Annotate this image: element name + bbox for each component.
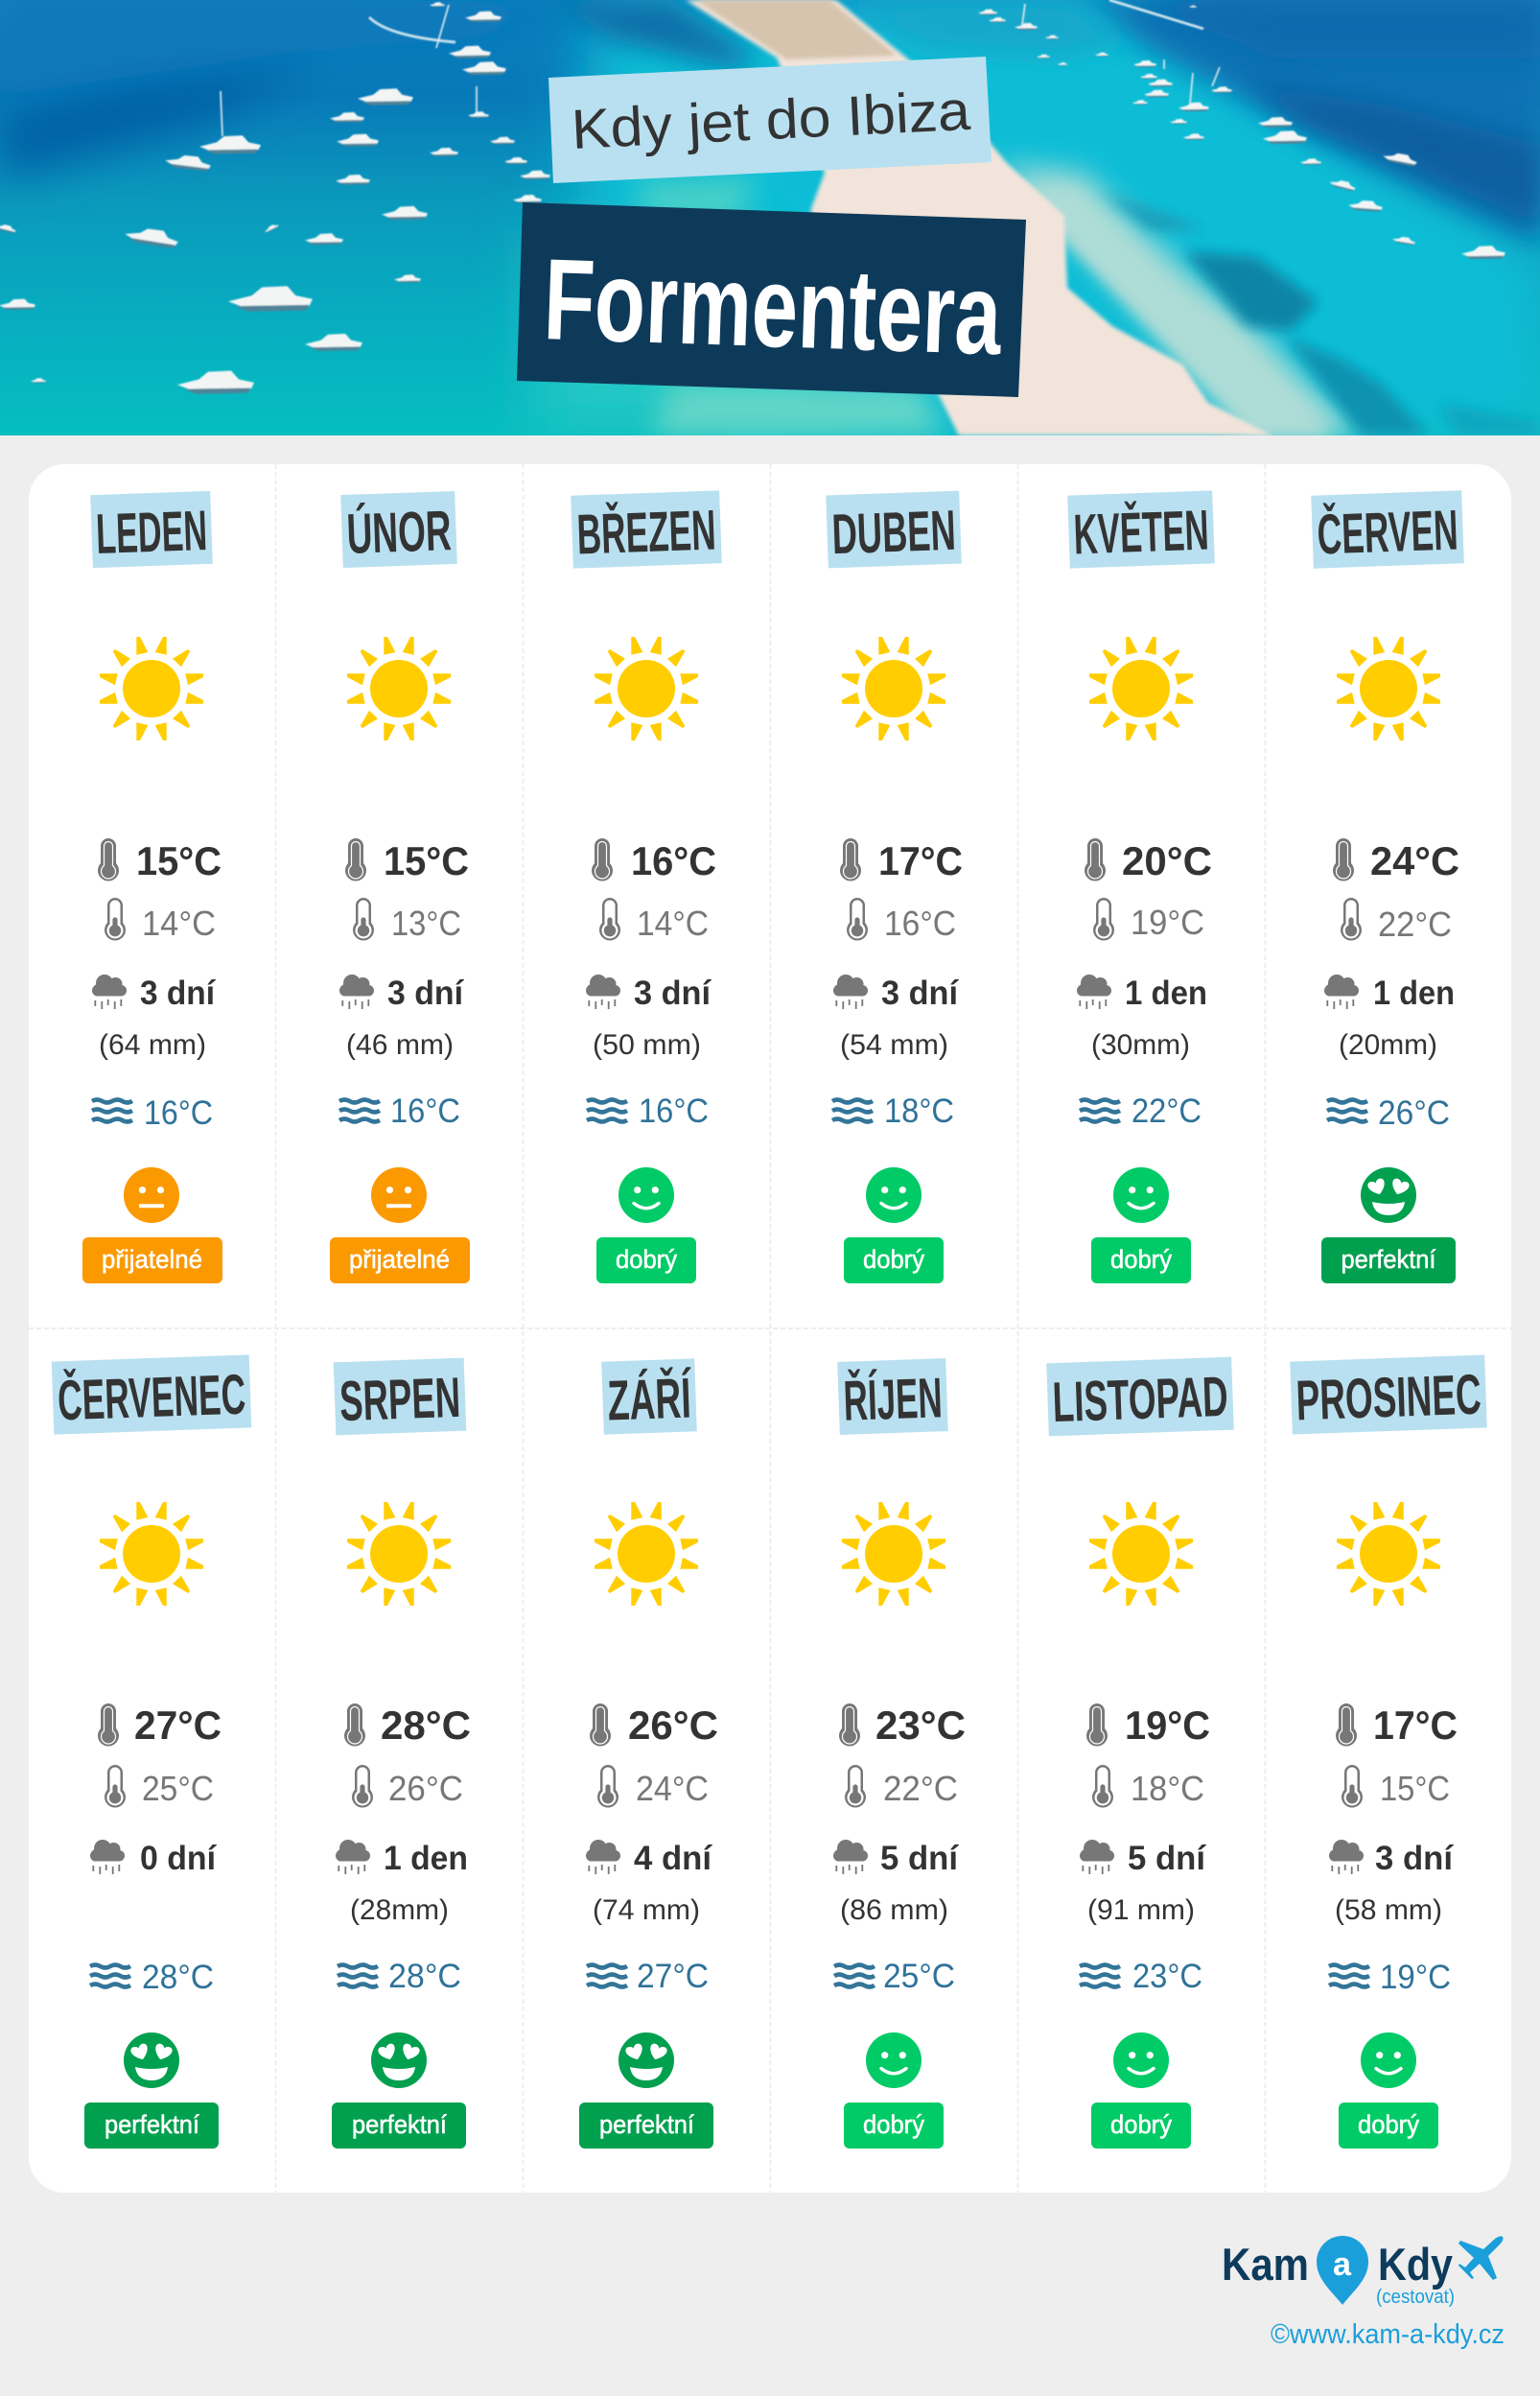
icon: rain cloud <box>1080 1840 1114 1874</box>
icon: thermometer min <box>847 898 868 941</box>
icon: thermometer max <box>98 838 119 881</box>
icon: rain cloud <box>92 975 127 1009</box>
icon: love face <box>371 2032 427 2088</box>
icon: waves <box>90 1964 130 1987</box>
precipitation: (50 mm) <box>593 1029 701 1061</box>
min temperature: 22°C <box>1378 904 1452 944</box>
sea temperature: 16°C <box>144 1094 213 1132</box>
icon: thermometer max <box>592 838 613 881</box>
max temperature: 24°C <box>1370 838 1459 883</box>
footer logo: Kam a Kdy (cestovat) <box>1222 2236 1504 2308</box>
precipitation: (28mm) <box>350 1894 449 1926</box>
month heading <box>826 491 962 568</box>
month heading: ČERVENEC <box>57 1362 246 1432</box>
sea temperature: 28°C <box>142 1959 214 1996</box>
icon: thermometer min <box>597 1765 618 1808</box>
rating badge <box>84 2102 219 2149</box>
icon: waves <box>834 1964 875 1987</box>
min temperature: 22°C <box>883 1769 958 1808</box>
icon: happy face <box>618 1167 674 1223</box>
rating badge: dobrý <box>616 1245 677 1274</box>
month heading <box>340 491 457 568</box>
min temperature: 14°C <box>142 904 216 943</box>
icon: sun <box>842 637 945 740</box>
icon: happy face <box>866 1167 922 1223</box>
rating badge: dobrý <box>1358 2110 1419 2139</box>
month heading <box>1046 1357 1234 1436</box>
month heading: DUBEN <box>830 499 957 566</box>
icon: waves <box>92 1099 132 1122</box>
month heading <box>52 1354 251 1435</box>
sea temperature: 19°C <box>1380 1959 1451 1996</box>
precipitation: (58 mm) <box>1335 1894 1442 1926</box>
icon: thermometer max <box>1085 838 1106 881</box>
footer logo: Kam a Kdy (cestovat): a <box>1333 2246 1352 2283</box>
icon: rain cloud <box>339 975 374 1009</box>
icon: thermometer min <box>105 898 126 941</box>
icon: waves <box>1327 1099 1367 1122</box>
month heading <box>90 491 213 568</box>
month panel: ÚNOR <box>330 491 470 1283</box>
icon: love face <box>618 2032 674 2088</box>
month panel: KVĚTEN <box>1067 490 1215 1283</box>
month heading <box>1067 490 1215 569</box>
max temperature: 19°C <box>1125 1703 1210 1748</box>
min temperature: 14°C <box>637 904 709 943</box>
month heading: ŘÍJEN <box>842 1365 944 1433</box>
min temperature: 18°C <box>1131 1769 1204 1808</box>
rating badge <box>1091 1237 1191 1283</box>
icon: rain cloud <box>586 1840 620 1874</box>
icon: rain cloud <box>1324 975 1359 1009</box>
min temperature: 24°C <box>636 1769 709 1808</box>
month panel: ŘÍJEN <box>833 1358 966 2149</box>
icon: sun <box>100 637 203 740</box>
rating badge: dobrý <box>1110 1245 1172 1274</box>
icon: sun <box>842 1502 945 1606</box>
website copyright: ©www.kam-a-kdy.cz <box>1271 2319 1505 2350</box>
icon: thermometer min <box>1092 1765 1113 1808</box>
footer logo: Kam a Kdy (cestovat): Kam <box>1222 2239 1309 2290</box>
icon: waves <box>1080 1099 1120 1122</box>
icon: airplane <box>1458 2236 1504 2280</box>
rainy days: 3 dní <box>140 975 216 1012</box>
rating badge: přijatelné <box>102 1245 202 1274</box>
rating badge: perfektní <box>352 2110 447 2139</box>
max temperature: 27°C <box>134 1703 222 1748</box>
month heading <box>571 490 722 569</box>
rating badge: dobrý <box>1110 2110 1172 2139</box>
rainy days: 0 dní <box>140 1840 217 1877</box>
icon: happy face <box>1361 2032 1416 2088</box>
icon: thermometer min <box>845 1765 866 1808</box>
icon: rain cloud <box>833 1840 868 1874</box>
rating badge <box>82 1237 222 1283</box>
icon: sun <box>595 637 698 740</box>
sea temperature: 16°C <box>639 1092 709 1130</box>
month heading <box>601 1358 697 1435</box>
max temperature: 26°C <box>628 1703 718 1748</box>
sea temperature: 25°C <box>883 1958 955 1995</box>
rating badge: přijatelné <box>349 1245 450 1274</box>
precipitation: (54 mm) <box>840 1029 948 1061</box>
month heading: ZÁŘÍ <box>606 1365 693 1432</box>
rating badge: perfektní <box>1341 1245 1436 1274</box>
min temperature: 19°C <box>1131 903 1204 942</box>
min temperature: 26°C <box>388 1769 463 1808</box>
icon: thermometer min <box>352 1765 373 1808</box>
max temperature: 20°C <box>1122 838 1212 883</box>
sea temperature: 16°C <box>390 1092 460 1130</box>
month panel: SRPEN <box>332 1358 471 2149</box>
month heading: SRPEN <box>338 1366 461 1433</box>
icon: sun <box>595 1502 698 1606</box>
rainy days: 3 dní <box>634 975 712 1012</box>
min temperature: 25°C <box>142 1769 214 1808</box>
month heading <box>837 1358 948 1435</box>
icon: map pin <box>1317 2236 1368 2305</box>
rating badge <box>1091 2102 1191 2149</box>
subtitle banner: Kdy jet do Ibiza <box>548 57 992 183</box>
rainy days: 1 den <box>1125 975 1207 1012</box>
min temperature: 13°C <box>391 904 461 943</box>
icon: waves <box>832 1099 873 1122</box>
icon: rain cloud <box>90 1840 125 1874</box>
month panel: LEDEN <box>82 491 222 1283</box>
icon: waves <box>338 1964 378 1987</box>
title banner: Formentera: Formentera <box>542 235 1004 379</box>
min temperature: 15°C <box>1380 1769 1450 1808</box>
rating badge: dobrý <box>863 1245 924 1274</box>
max temperature: 17°C <box>1373 1703 1458 1748</box>
precipitation: (30mm) <box>1091 1029 1190 1061</box>
icon: thermometer max <box>839 1703 860 1747</box>
rating badge <box>579 2102 713 2149</box>
icon: waves <box>339 1099 380 1122</box>
icon: sun <box>1337 1502 1440 1606</box>
rating badge: perfektní <box>599 2110 694 2139</box>
month panel: LISTOPAD <box>1046 1357 1234 2149</box>
month panel: ČERVEN <box>1311 490 1464 1283</box>
icon: love face <box>1361 1167 1416 1223</box>
footer logo: Kam a Kdy (cestovat): Kdy <box>1378 2239 1453 2290</box>
rating badge <box>596 1237 696 1283</box>
icon: sun <box>1089 1502 1193 1606</box>
icon: thermometer min <box>105 1765 126 1808</box>
hero photo: aerial view of Formentera beach and boats <box>0 0 1540 435</box>
sea temperature: 27°C <box>637 1958 709 1995</box>
sea temperature: 23°C <box>1132 1958 1202 1995</box>
precipitation: (86 mm) <box>840 1894 948 1926</box>
icon: sun <box>1089 637 1193 740</box>
sea temperature: 22°C <box>1132 1092 1202 1130</box>
icon: happy face <box>866 2032 922 2088</box>
icon: sun <box>347 637 451 740</box>
icon: love face <box>124 2032 179 2088</box>
icon: happy face <box>1113 1167 1169 1223</box>
icon: thermometer max <box>1336 1703 1357 1747</box>
rating badge <box>1321 1237 1456 1283</box>
precipitation: (20mm) <box>1339 1029 1437 1061</box>
icon: thermometer min <box>1342 1765 1363 1808</box>
month panel: DUBEN <box>826 491 963 1283</box>
sea temperature: 18°C <box>884 1092 954 1130</box>
icon: rain cloud <box>833 975 868 1009</box>
icon: happy face <box>1113 2032 1169 2088</box>
icon: thermometer max <box>345 838 366 881</box>
min temperature: 16°C <box>884 904 956 943</box>
icon: thermometer min <box>1093 898 1114 941</box>
rating badge: dobrý <box>863 2110 924 2139</box>
rainy days: 3 dní <box>1375 1840 1454 1877</box>
precipitation: (91 mm) <box>1087 1894 1195 1926</box>
rainy days: 1 den <box>384 1840 468 1877</box>
icon: sun <box>1337 637 1440 740</box>
month panel: PROSINEC <box>1290 1354 1487 2149</box>
rating badge <box>332 2102 466 2149</box>
month heading: ÚNOR <box>345 499 453 566</box>
rating badge <box>844 1237 944 1283</box>
max temperature: 23°C <box>875 1703 966 1748</box>
sea temperature: 28°C <box>388 1958 461 1995</box>
icon: thermometer max <box>840 838 861 881</box>
max temperature: 15°C <box>384 838 469 883</box>
footer logo: Kam a Kdy (cestovat): (cestovat) <box>1376 2287 1455 2308</box>
icon: waves <box>1080 1964 1120 1987</box>
month panel: ZÁŘÍ <box>579 1358 718 2149</box>
icon: waves <box>587 1099 627 1122</box>
icon: thermometer min <box>1341 898 1362 941</box>
icon: thermometer max <box>1086 1703 1108 1747</box>
max temperature: 28°C <box>381 1703 471 1748</box>
icon: thermometer max <box>98 1703 119 1747</box>
rating badge: perfektní <box>105 2110 199 2139</box>
month heading: LISTOPAD <box>1052 1365 1229 1434</box>
panel: monthly weather calendar <box>29 464 1511 2193</box>
month heading <box>1311 490 1464 569</box>
icon: rain cloud <box>336 1840 370 1874</box>
icon: rain cloud <box>1077 975 1111 1009</box>
precipitation: (46 mm) <box>346 1029 454 1061</box>
icon: rain cloud <box>1329 1840 1364 1874</box>
rainy days: 5 dní <box>1128 1840 1206 1877</box>
rating badge <box>330 1237 470 1283</box>
icon: rain cloud <box>586 975 620 1009</box>
rainy days: 1 den <box>1373 975 1455 1012</box>
rainy days: 5 dní <box>880 1840 959 1877</box>
month panel: BŘEZEN <box>571 490 722 1283</box>
rainy days: 4 dní <box>634 1840 712 1877</box>
icon: thermometer min <box>599 898 620 941</box>
sea temperature: 26°C <box>1378 1094 1450 1132</box>
rainy days: 3 dní <box>881 975 959 1012</box>
icon: thermometer max <box>344 1703 365 1747</box>
icon: thermometer min <box>353 898 374 941</box>
month heading: KVĚTEN <box>1072 498 1210 566</box>
icon: neutral face <box>124 1167 179 1223</box>
icon: neutral face <box>371 1167 427 1223</box>
month heading: LEDEN <box>95 499 208 566</box>
icon: thermometer max <box>590 1703 611 1747</box>
max temperature: 16°C <box>631 838 716 883</box>
max temperature: 15°C <box>136 838 222 883</box>
icon: sun <box>347 1502 451 1606</box>
icon: waves <box>587 1964 627 1987</box>
month panel: ČERVENEC <box>52 1354 251 2149</box>
max temperature: 17°C <box>878 838 963 883</box>
month heading: BŘEZEN <box>575 497 717 567</box>
title banner: Formentera <box>517 202 1026 397</box>
rainy days: 3 dní <box>387 975 464 1012</box>
icon: sun <box>100 1502 203 1606</box>
icon: waves <box>1329 1964 1369 1987</box>
icon: thermometer max <box>1333 838 1354 881</box>
rating badge <box>844 2102 944 2149</box>
rating badge <box>1339 2102 1438 2149</box>
subtitle banner: Kdy jet do Ibiza: Kdy jet do Ibiza <box>570 80 972 161</box>
precipitation: (64 mm) <box>99 1029 206 1061</box>
month heading <box>334 1358 466 1435</box>
precipitation: (74 mm) <box>593 1894 700 1926</box>
